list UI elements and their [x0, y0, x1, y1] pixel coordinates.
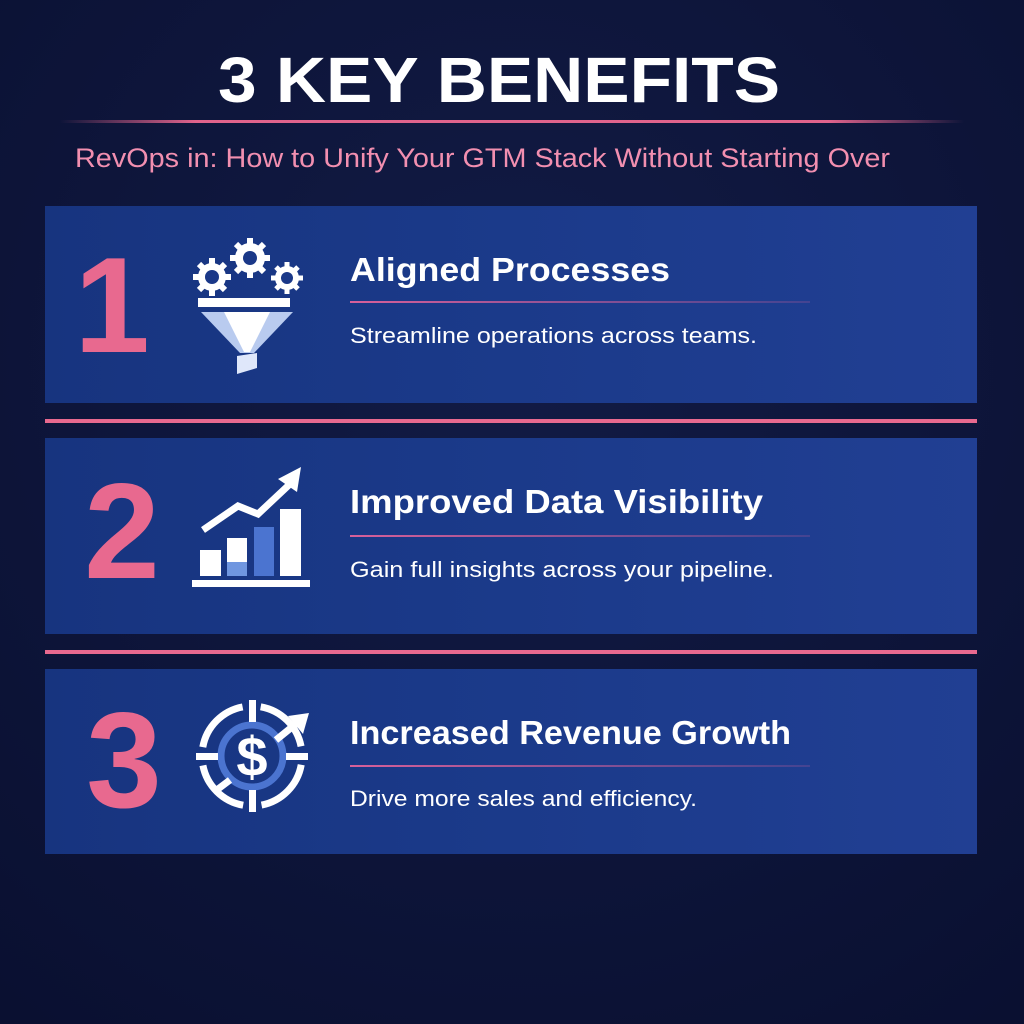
- number 1: 1: [74, 229, 150, 381]
- heading: Improved Data Visibility: [350, 483, 764, 520]
- icon: bar chart: [192, 467, 310, 587]
- icon: dollar target: [194, 698, 310, 814]
- panel: data visibility: [45, 438, 977, 634]
- description: Gain full insights across your pipeline.: [350, 557, 774, 582]
- divider: [45, 650, 977, 654]
- icon: gears funnel: [193, 238, 303, 374]
- panel: revenue growth: [45, 669, 977, 854]
- panel: aligned processes: [45, 206, 977, 403]
- title underline: [60, 120, 964, 123]
- number 3: 3: [86, 684, 162, 836]
- title: 3 KEY BENEFITS: [218, 44, 780, 116]
- description: Drive more sales and efficiency.: [350, 786, 697, 811]
- heading: Increased Revenue Growth: [350, 714, 791, 751]
- subtitle: RevOps in: How to Unify Your GTM Stack Without Starting Over: [75, 143, 890, 173]
- heading: Aligned Processes: [350, 251, 670, 288]
- number 2: 2: [84, 455, 160, 607]
- divider: [45, 419, 977, 423]
- description: Streamline operations across teams.: [350, 323, 757, 348]
- icon: dollar target: $: [236, 725, 268, 788]
